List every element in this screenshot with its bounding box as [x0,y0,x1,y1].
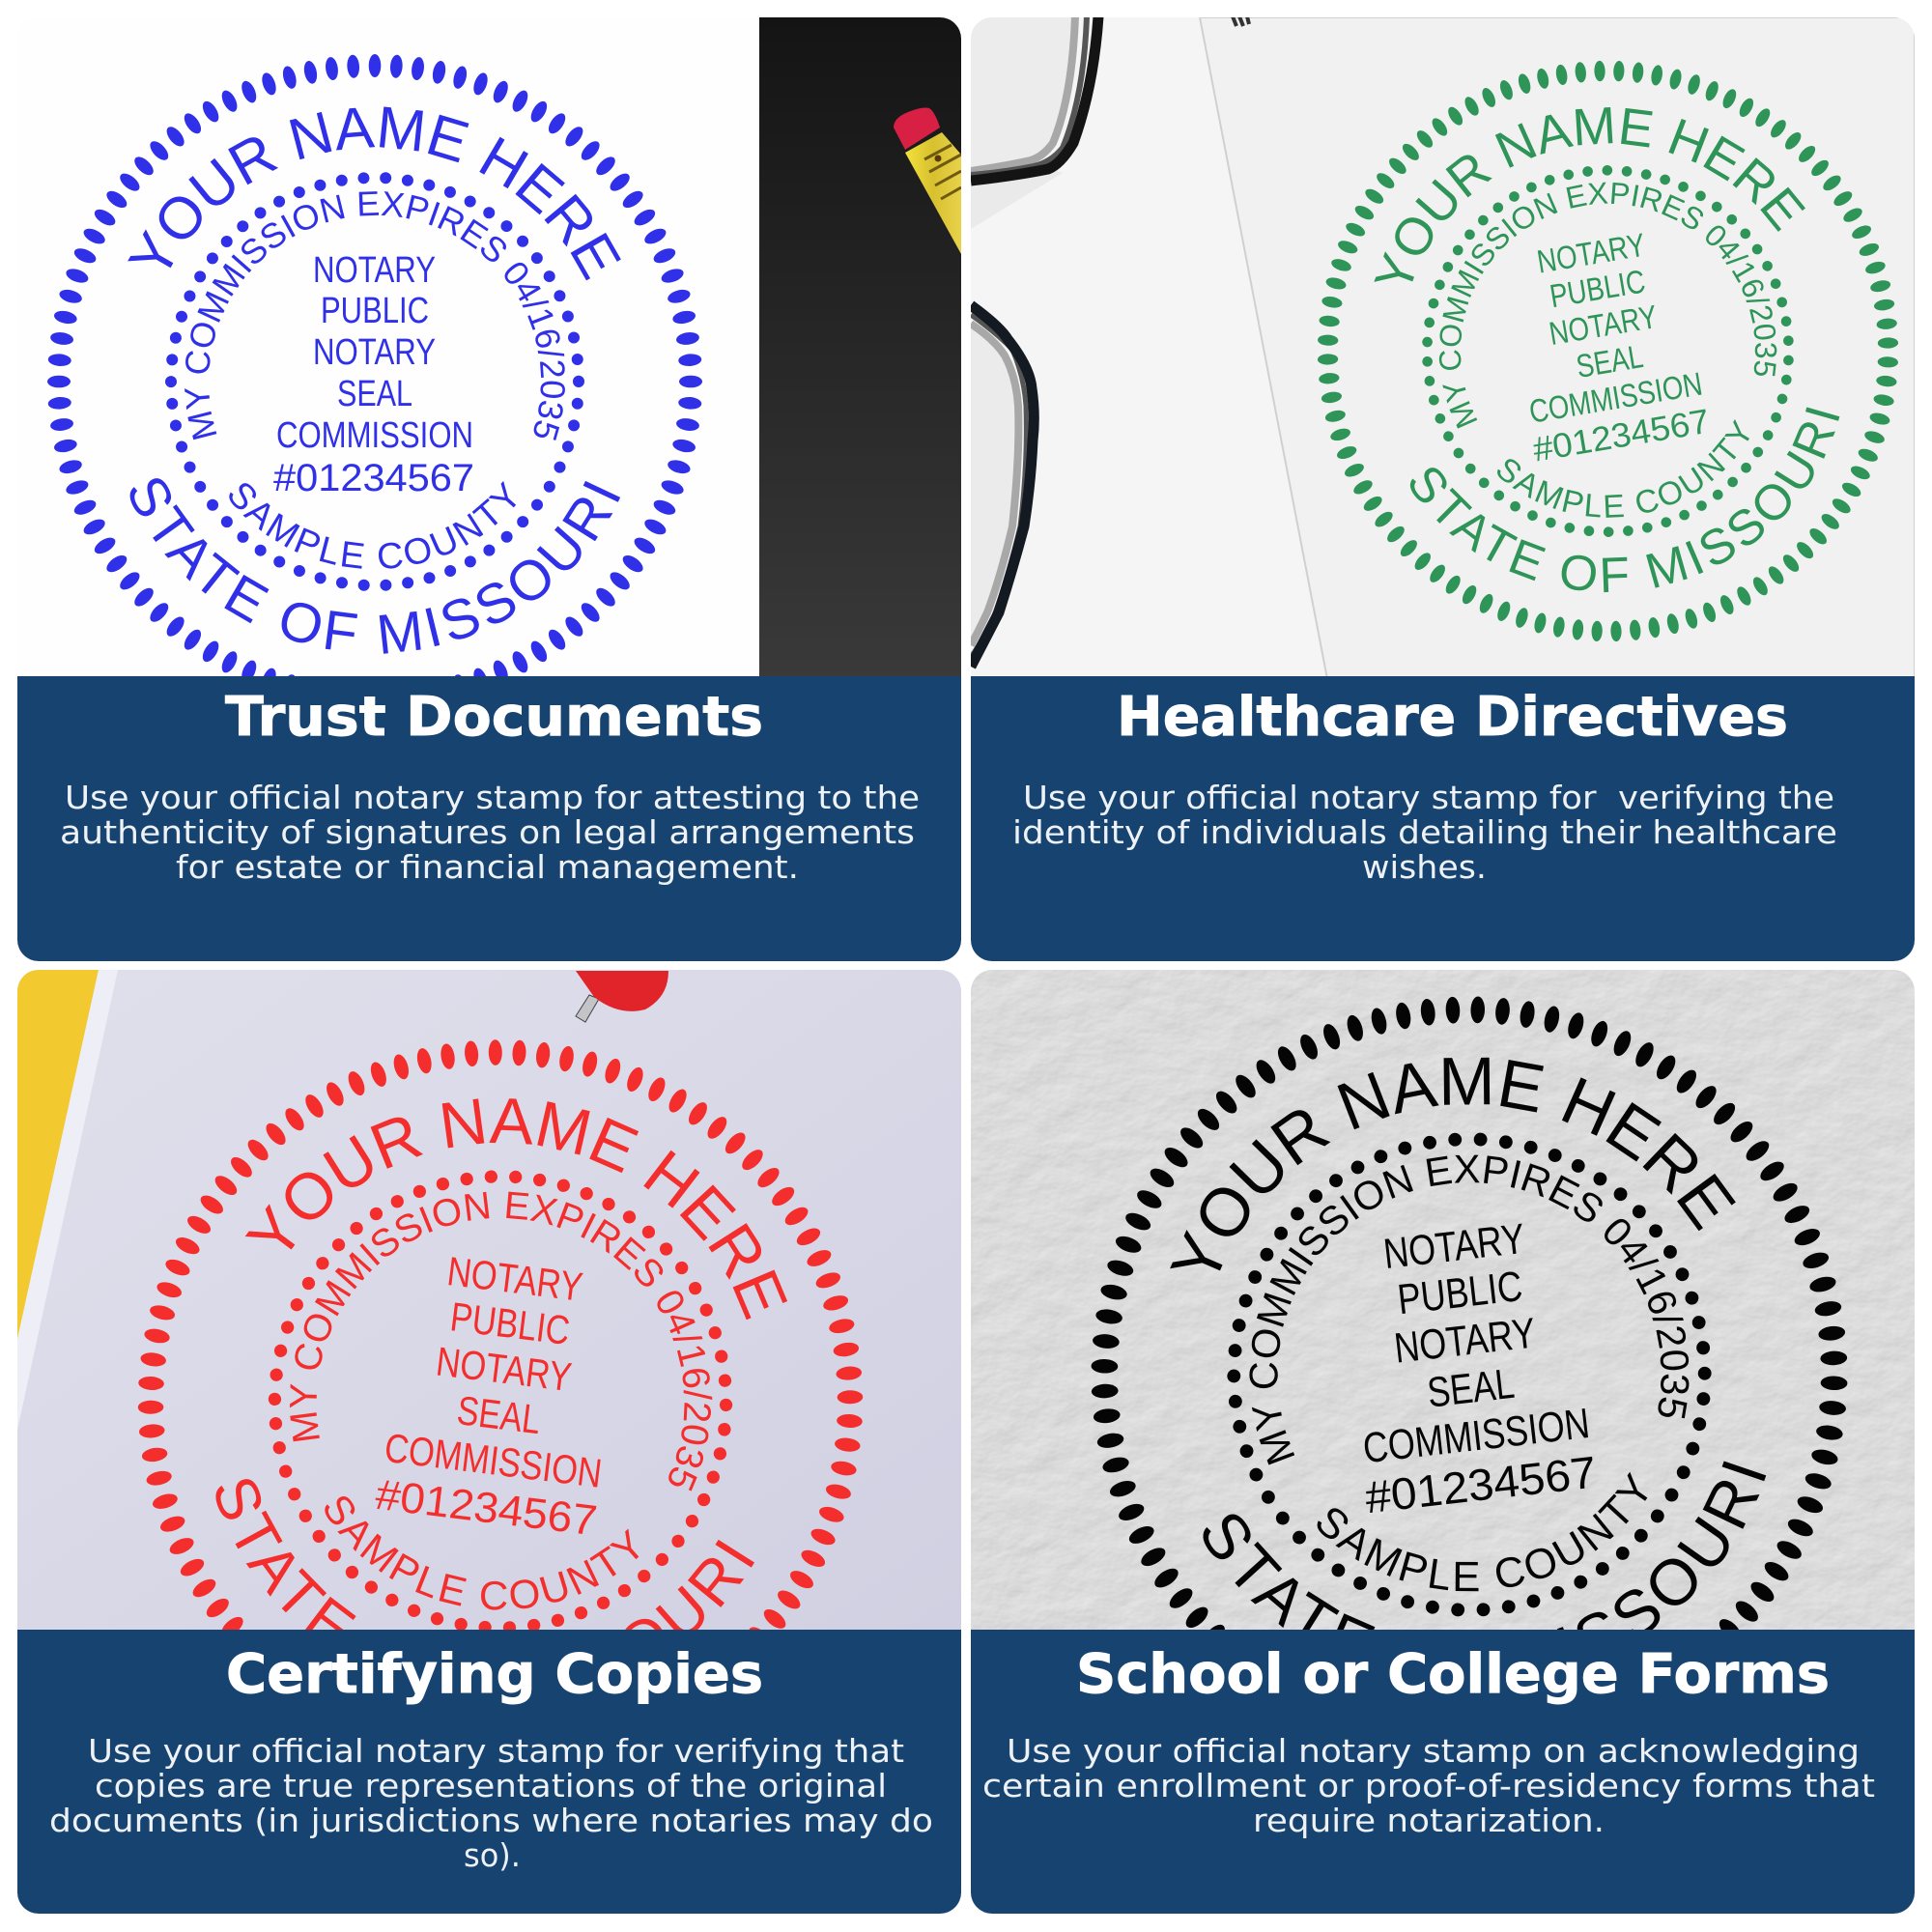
stamp: red notary seal: #01234567 [373,1471,600,1545]
text block [49,1732,933,1874]
stamp: blue notary seal: NOTARY [313,250,436,291]
stamp: red notary seal: YOUR NAME HERE [245,1098,787,1320]
text block: Use your official notary stamp for attesting to the [65,779,920,816]
stamp: black notary seal: MY COMMISSION EXPIRES 04/16/2035 [1249,1155,1689,1464]
stamp: blue notary seal [47,54,702,676]
stamp: green notary seal: STATE OF MISSOURI [1410,408,1839,593]
text block: Use your official notary stamp on acknowledging [1007,1732,1860,1770]
photo background: white paper [17,17,759,961]
stamp: black notary seal: NOTARY [1392,1309,1538,1373]
stamp: red notary seal: MY COMMISSION EXPIRES 04/16/2035 [290,1192,713,1492]
stamp: blue notary seal: COMMISSION [276,415,473,456]
icon: notebook binding marks [1233,16,1249,26]
stamp: black notary seal: SAMPLE COUNTY [1318,1472,1648,1592]
stamp: red notary seal: PUBLIC [448,1293,572,1353]
stamp: red notary seal: STATE OF MISSOURI [215,1479,754,1630]
icon: red push pin [576,971,668,1022]
stamp: black notary seal [1092,997,1847,1630]
stamp: black notary seal: COMMISSION [1360,1400,1592,1472]
heading: Certifying Copies [226,1643,763,1706]
text block [1015,784,1835,879]
stamp: green notary seal: MY COMMISSION EXPIRES 04/16/2035 [1439,182,1777,429]
text block: Use your official notary stamp for verifying the [1023,779,1834,816]
panel: Trust Documents [17,17,961,961]
stamp: blue notary seal: YOUR NAME HERE [128,106,621,280]
stamp: black notary seal: SEAL [1425,1360,1517,1417]
panel: Healthcare Directives [971,17,1915,961]
text block: require notarization. [1253,1802,1605,1839]
photo background: paper edge [17,970,118,1430]
text block: for estate or financial management. [176,848,799,886]
photo background: dark desk [759,17,961,684]
stamp: black notary seal: YOUR NAME HERE [1170,1057,1736,1271]
photo background: textured paper [971,970,1915,1636]
stamp: green notary seal: COMMISSION [1526,365,1705,431]
stamp: blue notary seal: STATE OF MISSOURI [129,478,620,654]
panel: School or College Forms [971,970,1915,1914]
stamp: green notary seal: NOTARY [1547,298,1660,353]
stamp: black notary seal: NOTARY [1381,1215,1527,1278]
text block: wishes. [1362,848,1487,886]
text block: Use your official notary stamp for verifying that [88,1732,904,1770]
text block: so). [464,1836,521,1874]
photo background: yellow folder [17,970,99,1339]
text block: copies are true representations of the original [95,1767,887,1804]
heading: School or College Forms [1076,1643,1830,1706]
stamp: green notary seal: SAMPLE COUNTY [1497,419,1749,518]
stamp: black notary seal: STATE OF MISSOURI [1203,1461,1766,1630]
text block: identity of individuals detailing their healthcare [1012,813,1837,851]
stamp: green notary seal: SEAL [1574,338,1646,385]
stamp: red notary seal: COMMISSION [383,1425,605,1496]
stamp: blue notary seal: PUBLIC [321,291,429,331]
text block [60,779,920,886]
icon: eyeglasses [971,16,1098,667]
stamp: blue notary seal: NOTARY [313,332,436,373]
stamp: green notary seal: YOUR NAME HERE [1374,107,1805,282]
photo background: paper sheet [1200,17,1915,684]
heading: Healthcare Directives [1117,686,1788,749]
stamp: blue notary seal: MY COMMISSION EXPIRES 04/16/2035 [185,191,565,440]
stamp: black notary seal: PUBLIC [1395,1263,1524,1323]
text block: certain enrollment or proof-of-residency forms that [982,1767,1875,1804]
stamp: red notary seal: SEAL [455,1387,543,1442]
text block: authenticity of signatures on legal arrangements [60,813,915,851]
stamp: blue notary seal: SEAL [337,374,412,414]
stamp: blue notary seal: SAMPLE COUNTY [229,481,516,569]
stamp: red notary seal: NOTARY [444,1248,585,1310]
stamp: black notary seal: #01234567 [1363,1446,1599,1522]
caption band [17,1630,961,1914]
photo background: desk [971,17,1325,676]
stamp: red notary seal: SAMPLE COUNTY [325,1496,639,1610]
text block [982,1732,1875,1839]
stamp: green notary seal: NOTARY [1534,227,1648,281]
text block: documents (in jurisdictions where notaries may do [49,1802,933,1839]
heading: Trust Documents [225,686,763,749]
photo background: lavender paper [17,970,961,1636]
panel: Certifying Copies [17,970,961,1914]
stamp: green notary seal [1318,60,1899,641]
icon: pencil [894,108,961,254]
caption band [17,676,961,961]
stamp: blue notary seal: #01234567 [273,457,474,499]
caption band [971,1630,1915,1914]
stamp: green notary seal: PUBLIC [1548,263,1648,315]
caption band [971,676,1915,961]
stamp: red notary seal [137,1039,864,1630]
stamp: red notary seal: NOTARY [434,1338,574,1400]
stamp: green notary seal: #01234567 [1530,402,1712,469]
